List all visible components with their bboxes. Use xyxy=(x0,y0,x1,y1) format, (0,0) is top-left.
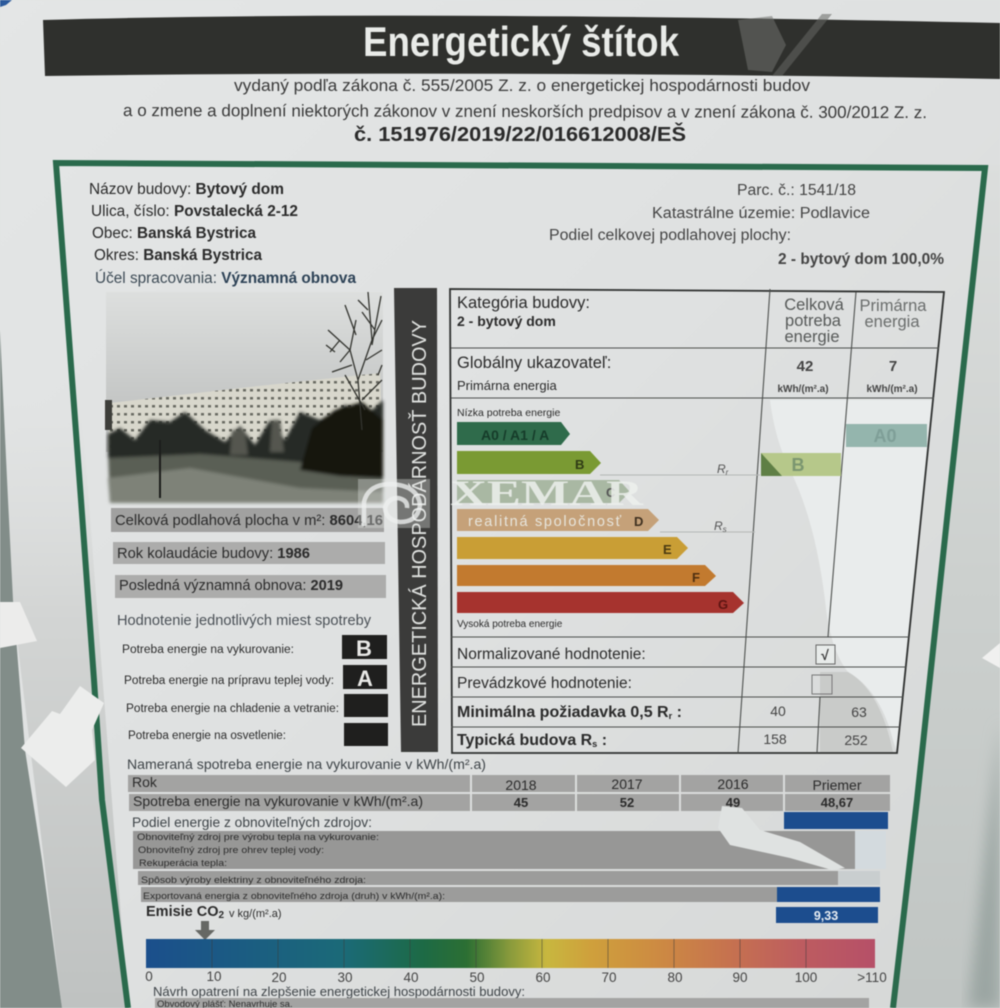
improvement proposals xyxy=(153,984,869,1008)
global indicator: 42 xyxy=(797,358,813,375)
scale labels: 90 xyxy=(732,970,748,985)
reference markers xyxy=(714,462,729,534)
scale labels: 10 xyxy=(206,969,222,984)
building identification: Názov budovy: Bytový dom xyxy=(89,181,284,198)
scale labels: 40 xyxy=(403,970,419,985)
building identification xyxy=(89,181,356,287)
measured consumption table: 2018 xyxy=(505,777,537,793)
green frame xyxy=(56,163,985,1008)
parcel details: Parc. č.: 1541/18 xyxy=(737,182,856,199)
scale labels: >110 xyxy=(857,970,887,985)
building identification: Obec: Banská Bystrica xyxy=(92,225,256,242)
measured consumption table: Rok xyxy=(132,774,158,790)
energy class table xyxy=(450,289,944,753)
measured consumption table xyxy=(127,756,890,811)
requirement rows: 252 xyxy=(844,732,868,748)
global indicator: Globálny ukazovateľ: xyxy=(457,354,611,372)
consumption ratings: A xyxy=(357,666,373,691)
scale labels: 80 xyxy=(667,970,683,985)
category header: 2 - bytový dom xyxy=(457,313,556,329)
renewable energy share: Exportovaná energia z obnoviteľného zdroja (druh) v kWh/(m².a): xyxy=(143,891,445,902)
parcel details: Podiel celkovej podlahovej plochy: xyxy=(549,227,791,244)
energy class arrows: A0 / A1 / A xyxy=(481,427,549,443)
global indicator: kWh/(m².a) xyxy=(866,384,918,395)
column headers: Celková xyxy=(784,296,845,314)
renewable energy share: Obnoviteľný zdroj pre výrobu tepla na vykurovanie: xyxy=(137,832,379,843)
CO2 emissions scale xyxy=(145,904,887,985)
energy class arrows: Vysoká potreba energie xyxy=(457,619,563,630)
requirement rows xyxy=(457,703,868,749)
assessment rows: Normalizované hodnotenie: xyxy=(457,646,646,663)
building facts: Rok kolaudácie budovy: 1986 xyxy=(117,545,310,562)
consumption ratings: B xyxy=(356,636,372,661)
consumption ratings: Hodnotenie jednotlivých miest spotreby xyxy=(117,613,372,629)
building facts xyxy=(111,508,386,598)
scale labels: 70 xyxy=(601,970,617,985)
class A0 indicator xyxy=(846,424,927,447)
scale labels: 0 xyxy=(145,969,153,984)
measured consumption table: 52 xyxy=(620,795,634,810)
column headers: energie xyxy=(784,328,840,346)
column headers: potreba xyxy=(785,312,842,330)
global indicator: Primárna energia xyxy=(457,378,557,393)
renewable energy share: Spôsob výroby elektriny z obnoviteľného zdroja: xyxy=(141,875,366,886)
CO2 emissions scale: v kg/(m².a) xyxy=(229,908,282,920)
dark reflection on table xyxy=(820,672,893,752)
requirement rows: 158 xyxy=(763,731,787,747)
requirement rows: : xyxy=(672,704,682,721)
CO2 emissions scale: Emisie CO xyxy=(146,904,219,920)
energy class arrows: E xyxy=(663,542,672,557)
tape right xyxy=(982,643,1000,668)
requirement rows: s xyxy=(592,739,597,749)
assessment rows: √ xyxy=(821,647,829,663)
table grid xyxy=(450,289,944,753)
requirement rows: : xyxy=(597,732,607,749)
assessment rows: Prevádzkové hodnotenie: xyxy=(457,675,632,692)
energy class arrows: D xyxy=(634,514,643,529)
class B indicator: B xyxy=(792,455,804,475)
watermark xyxy=(358,473,644,530)
measured consumption table: 49 xyxy=(726,795,740,810)
assessment rows xyxy=(457,645,835,694)
requirement rows: 63 xyxy=(851,704,867,720)
requirement rows: Typická budova R xyxy=(457,732,588,749)
icon: marker arrow xyxy=(195,921,215,940)
global indicator: 7 xyxy=(889,358,897,375)
consumption ratings: Potreba energie na prípravu teplej vody: xyxy=(124,675,334,687)
energy class arrows: F xyxy=(692,570,700,585)
building facts: Posledná významná obnova: 2019 xyxy=(119,577,343,594)
scale labels: 100 xyxy=(795,970,817,985)
color scale xyxy=(146,939,875,968)
category header: Kategória budovy: xyxy=(457,294,590,312)
subtitle: a o zmene a doplnení niektorých zákonov v znení neskorších predpisov a v znení zákona č. 300/2012 Z. z. xyxy=(123,101,927,122)
renewable energy share: Obnoviteľný zdroj pre ohrev teplej vody: xyxy=(138,845,324,856)
reference markers: R xyxy=(717,462,726,476)
measured consumption table: Nameraná spotreba energie na vykurovanie v kWh/(m².a) xyxy=(127,756,486,772)
requirement rows: 40 xyxy=(770,703,786,719)
watermark: XEMAR xyxy=(450,473,644,513)
building identification: Okres: Banská Bystrica xyxy=(94,247,262,264)
tape lower left xyxy=(21,686,104,787)
vertical band heading: ENERGETICKÁ HOSPODÁRNOSŤ BUDOVY xyxy=(408,320,431,727)
parcel details: Katastrálne územie: Podlavice xyxy=(652,205,870,222)
energy class arrows xyxy=(457,407,744,630)
improvement proposals: Návrh opatrení na zlepšenie energetickej hospodárnosti budovy: xyxy=(153,984,525,999)
parcel details: 2 - bytový dom 100,0% xyxy=(778,251,944,268)
subtitle xyxy=(123,76,927,146)
scale labels: 20 xyxy=(271,970,287,985)
tape left xyxy=(0,602,37,648)
measured consumption table: 2016 xyxy=(717,776,749,792)
scale labels xyxy=(145,969,887,985)
title banner: Energetický štítok xyxy=(363,18,680,65)
consumption ratings: Potreba energie na osvetlenie: xyxy=(128,730,286,742)
scale labels: 60 xyxy=(535,970,551,985)
requirement rows: r xyxy=(669,711,673,721)
subtitle: č. 151976/2019/22/016612008/EŠ xyxy=(354,122,686,146)
class A0 indicator: A0 xyxy=(873,426,897,446)
consumption ratings xyxy=(117,613,388,746)
building identification: Ulica, číslo: Povstalecká 2-12 xyxy=(91,203,298,220)
parcel details xyxy=(549,182,944,268)
scale labels: 30 xyxy=(337,970,353,985)
measured consumption table: Spotreba energie na vykurovanie v kWh/(m².a) xyxy=(133,793,423,809)
subtitle: vydaný podľa zákona č. 555/2005 Z. z. o energetickej hospodárnosti budov xyxy=(234,76,811,95)
consumption ratings: Potreba energie na chladenie a vetranie: xyxy=(126,703,339,715)
building facts: Celková podlahová plocha v m²: 8604,16 xyxy=(115,512,383,529)
category header xyxy=(457,294,590,329)
measured consumption table: Priemer xyxy=(812,777,862,793)
title banner xyxy=(43,14,1000,79)
energy class arrows: G xyxy=(718,597,728,612)
column headers: Primárna xyxy=(860,297,927,315)
building photo xyxy=(105,292,383,503)
energy class arrows: Nízka potreba energie xyxy=(457,407,560,419)
vertical band heading xyxy=(394,288,438,752)
renewable energy share xyxy=(132,806,888,902)
measured consumption table: 45 xyxy=(514,795,528,810)
tape streak xyxy=(718,806,845,870)
measured consumption table: 2017 xyxy=(611,776,643,792)
column headers xyxy=(784,296,927,346)
energy class arrows: B xyxy=(575,457,584,472)
building identification: Účel spracovania: Významná obnova xyxy=(95,270,356,287)
requirement rows: Minimálna požiadavka 0,5 R xyxy=(457,704,662,721)
light reflection on table xyxy=(770,400,933,752)
reference markers: r xyxy=(726,468,729,477)
scale labels: 50 xyxy=(469,970,485,985)
CO2 emissions scale: 9,33 xyxy=(814,909,838,923)
watermark: realitná spoločnosť xyxy=(468,514,622,530)
renewable energy share: Rekuperácia tepla: xyxy=(139,858,227,869)
consumption ratings: Potreba energie na vykurovanie: xyxy=(122,644,294,656)
column headers: energia xyxy=(864,313,920,331)
global indicator xyxy=(457,354,918,395)
energy class arrows: C xyxy=(606,485,616,500)
reference markers: s xyxy=(723,525,727,534)
class B indicator xyxy=(761,453,841,476)
global indicator: kWh/(m².a) xyxy=(777,384,829,395)
CO2 emissions scale: 2 xyxy=(219,910,225,921)
measured consumption table: 48,67 xyxy=(821,795,853,810)
reference markers: R xyxy=(714,519,723,533)
renewable energy share: Podiel energie z obnoviteľných zdrojov: xyxy=(132,815,372,830)
